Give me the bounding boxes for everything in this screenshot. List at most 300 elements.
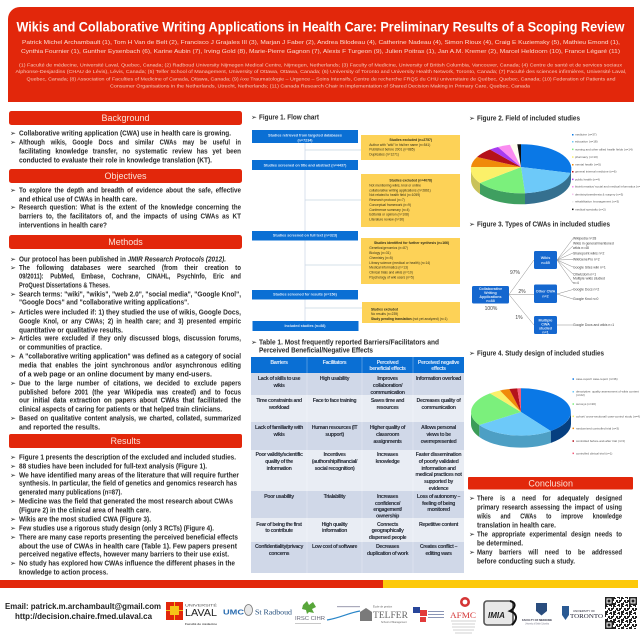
text block: results: ➢ (10, 454, 16, 462)
table cells: resources (377, 405, 399, 411)
table cells: to contribute (265, 528, 293, 534)
table cells: social recognition) (315, 466, 355, 472)
tree labels: Google Knol n=0 (573, 297, 598, 301)
logo: Telfer: TELFER (373, 611, 409, 621)
text block: conclusion: be determined. (477, 538, 523, 548)
text block: methods: Google Knol, or any CWAs; 2) in health care; and 3) presented empiric (19, 316, 241, 326)
box: included studies: Included studies (n=88) (284, 324, 326, 328)
legend: fields: medicine (n=37) (575, 133, 597, 137)
logo: University of Toronto: UNIVERSITY OF (573, 609, 595, 613)
affiliations (16, 62, 626, 88)
logo: Université Laval (166, 602, 218, 626)
table cells: information (322, 528, 347, 534)
table cells: Creates conflict – (420, 544, 458, 550)
table cells: Face to face training (313, 398, 356, 404)
tree labels: n=4 (573, 281, 579, 285)
pie chart: study design (471, 388, 571, 448)
text block: background: ➢ (10, 139, 16, 147)
QR code (605, 597, 637, 629)
heading: figure 1: Figure 1. Flow chart (259, 112, 319, 122)
table cells: workload (268, 405, 289, 411)
legend: fields: medical specialty (n=2) (575, 207, 606, 211)
box: multiple CWAs: CWA (541, 322, 550, 326)
percentages: 100% (485, 306, 498, 312)
box: multiple CWAs: n=1 (542, 330, 549, 334)
table header: Perceived (377, 360, 398, 366)
text block: results: synthesis. In particular, the field of genetics and genomics research has (19, 478, 237, 488)
table cells: Saves time and (371, 398, 404, 404)
table header: Facilitators (323, 360, 347, 366)
table cells: Increases (377, 494, 398, 500)
box: retrieved: Studies retrieved from targeted databases (268, 133, 342, 137)
logo: NPCF (413, 607, 444, 622)
percentages: 97% (510, 270, 521, 276)
text block: methods: 09/2011): PubMed, Embase, Cochrane, CINAHL, PsychInfo, Eric and (19, 272, 241, 280)
contact details: http://decision.chaire.fmed.ulaval.ca (15, 612, 153, 621)
table cells: dispersed people (369, 535, 407, 541)
text block: results: Wikis are the most studied CWA (Figure 3). (19, 514, 151, 524)
logo: IMIA: IMIA (488, 611, 505, 620)
percentages (485, 270, 526, 321)
exclusion box 2: Studies excluded (n=4078) (389, 178, 432, 182)
text block: methods: ➢ (10, 264, 16, 272)
table cells: Time constraints and (256, 398, 302, 404)
logo: University of Toronto: TORONTO (570, 614, 603, 620)
box: retrieved: (n=7234) (297, 139, 313, 143)
table cells: Information overload (416, 376, 461, 382)
table cells: wikis (272, 432, 285, 438)
box: included studies (252, 321, 358, 331)
tree labels: Citiwizdom n=1 (573, 272, 596, 276)
table cells: geographically (371, 528, 404, 534)
box: full text: Studies screened on full text (n=323) (273, 234, 338, 238)
header banner (8, 7, 634, 102)
exclusion box 2 (361, 174, 460, 227)
table cells: feeling of being (422, 501, 455, 507)
text block: results: about the use of CWAs in health care (Table 1). Few papers present (19, 542, 237, 550)
logo: IRSC CIHR (295, 601, 325, 624)
table header: beneficial effects (369, 366, 406, 372)
box: title and abstract: Studies screened on title and abstract (n=4437) (264, 163, 347, 167)
table cells: information and (421, 466, 456, 472)
heading: figure 1: ➢ (251, 114, 257, 122)
text block: methods: Search terms: "wiki", "wikis", "web 2.0", "social media", "Google Knol", (19, 290, 241, 298)
table cells: communication (370, 390, 405, 396)
table header: Barriers (270, 360, 288, 366)
table cells: Decreases (376, 544, 399, 550)
logo: swoosh (327, 606, 360, 620)
heading: conclusion: Conclusion (528, 479, 573, 489)
root box (472, 286, 509, 304)
text block: methods: quantitative or qualitative results. (19, 326, 123, 334)
synthesis box: Chemistry (n=5) (369, 256, 393, 260)
exclusion box 2: Research protocol (n=7) (369, 198, 405, 202)
tree labels: Google Docs and wikis n=1 (573, 323, 614, 327)
table cells: support) (325, 432, 344, 438)
text block: results: ➢ (10, 516, 16, 524)
text block: methods: ➢ (10, 415, 16, 423)
text block: objectives: Research question: What is the extent of the knowledge concerning the (19, 202, 241, 212)
text block: background: facilitating knowledge transfer, no systematic review has yet been (19, 146, 241, 156)
legend: fields: education (n=18) (575, 140, 598, 144)
text block: methods: Based on qualitative content analysis, we charted, collated, summarized (19, 414, 241, 422)
text block: methods: The following databases were searched (from their creation to (19, 263, 241, 272)
box: results screening (252, 290, 358, 300)
synthesis box: Psychology of wiki users (n=5) (369, 276, 414, 280)
text block: objectives (10, 186, 241, 230)
exclusion box 3: Study pending translation (not yet analyzed) (n=1) (371, 317, 448, 321)
table cells: Higher quality of (370, 425, 406, 431)
logo: Université Laval: UNIVERSITÉ (185, 602, 218, 608)
legend: fields: general internal medicine (n=6) (575, 170, 616, 174)
logo: Telfer (360, 604, 409, 624)
text block: objectives: ➢ (10, 187, 16, 195)
synthesis box: Genetics/genomics (n=87) (369, 246, 408, 250)
panel: background (9, 111, 242, 164)
legend: fields: mental health (n=5) (575, 163, 601, 167)
box: full text (252, 231, 358, 240)
panel: conclusion (468, 477, 633, 566)
box: multiple CWAs: studied (539, 326, 553, 330)
text block: results: There are many case reports presenting the perceived beneficial effects (19, 532, 238, 542)
table cells: High usability (320, 376, 350, 382)
exclusion box 2: Literature review (n=30) (369, 218, 404, 222)
text block: objectives: To explore the depth and breadth of evidence about the safe, effective (19, 186, 241, 194)
table cells: engagement/ (373, 507, 403, 513)
text block: methods: Articles were included if: 1) they studied the use of wikis, Google Docs, (19, 308, 241, 316)
exclusion box 2: Not related to health field (n=1059) (369, 193, 420, 197)
logo: UMC St Radboud (223, 604, 293, 616)
logo: University of Toronto (562, 606, 603, 620)
table cells: quality of the (265, 459, 293, 465)
text block: conclusion: ➢ (469, 495, 475, 503)
pie chart: fields (471, 144, 571, 204)
text block: methods: ➢ (10, 380, 16, 388)
table cells: classroom (376, 432, 400, 438)
text block: results: ➢ (10, 463, 16, 471)
heading: table 1 (251, 338, 439, 354)
text block: results (10, 452, 239, 576)
text block: results: ➢ (10, 560, 16, 568)
tree labels: Sharepoint wikis n=2 (573, 251, 604, 255)
tree labels: Google Sites wiki n=1 (573, 266, 606, 270)
legend: study design: (n=22) (576, 393, 585, 397)
text block: objectives: and ethical use of CWAs in health care. (19, 194, 137, 204)
exclusion box 3 (362, 302, 460, 323)
text block: conclusion: ➢ (469, 549, 475, 557)
affiliations: Quebec, Canada; (8) Association of Faculties of Medicine of Canada, Ottawa, Canada; (9) Axe Traumatologie – Urgence – Soins Intensifs, Centre de recherche FRQS du CHU universitaire de Québec, Quebec, Canada; (10) Federation of Patients and (26, 76, 616, 82)
table cells: concerns (269, 551, 290, 557)
logo: Telfer: École de gestion (373, 604, 393, 608)
text block: methods: clinical aspects of caring for patients or that helped train clinicians. (19, 404, 222, 414)
text block: conclusion: before conducting such a study. (477, 556, 575, 566)
heading: methods: Methods (108, 237, 143, 247)
heading: table 1: Perceived Beneficial/Negative Effects (259, 346, 373, 354)
table cells: views to be (426, 432, 451, 438)
legend: fields (572, 133, 640, 211)
table cells: information (267, 466, 292, 472)
logo: UMC St Radboud: St Radboud (255, 608, 293, 616)
box: multiple CWAs: Multiple (539, 318, 552, 322)
table cells: (authorship/financial/ (312, 459, 358, 465)
tree labels: wikis n=48 (573, 246, 589, 250)
heading: figure 2: Figure 2. Field of included studies (477, 114, 580, 122)
legend: study design: controlled clinical trial (n=1) (576, 451, 612, 455)
tree labels: Wikis in general/mentioned (573, 242, 614, 246)
text block: results: 88 studies have been included for full-text analysis (Figure 1). (19, 462, 207, 470)
root box: n=88 (486, 299, 495, 303)
table cells: Lack of skills to use (258, 376, 301, 382)
text block: methods: our initial data extraction on papers about CWAs that facilitated the (19, 396, 241, 404)
table cells: evidence (429, 486, 449, 492)
table rows (251, 373, 464, 573)
text block: methods: ProQuest Dissertations & Theses. (19, 280, 110, 290)
heading: objectives: Objectives (104, 171, 147, 181)
text block: conclusion: translation in health care. (477, 520, 556, 530)
text block: objectives: barriers to, the facilitators of, and the impacts of using CWAs as KT (19, 212, 241, 220)
legend: study design: randomized controlled trial (n=3) (576, 426, 619, 430)
table cells: Connects (377, 522, 398, 528)
text block: methods: Our protocol has been published in JMIR Research Protocols (2012). (19, 254, 226, 264)
text block: methods: ➢ (10, 335, 16, 343)
heading: table 1: ➢ (251, 339, 257, 347)
root box: Collaborative (479, 287, 502, 291)
heading: objectives (9, 169, 242, 183)
text block: results: We have identified many areas of the literature that will require further (19, 470, 239, 480)
logo: IMIA (484, 601, 516, 625)
text block: conclusion (469, 494, 622, 566)
authors: Patrick Michel Archambault (1), Tom H Van de Belt (2), Francisco J Grajales III (3), Marjan J Faber (2), Andrea Bilodeau (4), Catherine Nadeau (4), Simon Rioux (4), Craig E Kuziemsky (5), Mathieu Emond (1), (22, 40, 620, 46)
legend: fields: public health (n=4) (575, 177, 600, 181)
table cells: supported by (424, 479, 453, 485)
synthesis box: Clinical trials and wikis (n=10) (369, 270, 413, 274)
exclusion box 1: Duplicates (n=1271) (369, 152, 399, 156)
authors (21, 40, 620, 55)
affiliations: Consumer Organisations in the Netherlands, Utrecht, Netherlands; (11) Canada Research Chair in Implementation of Shared Decision Making in Primary Care, Quebec, Canada (110, 84, 531, 88)
legend: study design: descriptive: quality assessment of wikis content (576, 390, 639, 394)
root box: Writing (484, 291, 497, 295)
logo: AFMC (450, 597, 476, 633)
text block: results: ➢ (10, 534, 16, 542)
text block: methods: ➢ (10, 291, 16, 299)
table cells: Faster dissemination (416, 452, 461, 458)
exclusion box 1: Studies excluded (n=2757) (389, 138, 432, 142)
affiliations: (1) Faculté de médecine, Université Laval, Quebec, Canada; (2) Radboud University Nijmegen Medical Centre, Nijmegen, Netherlands; (3) Faculty of Medicine, University of British Columbia, Vancouver, Canada; (4) Centre de santé et de services sociaux (19, 62, 623, 68)
text block: background: Collaborative writing application (CWA) use in health care is growing. (19, 128, 231, 138)
synthesis box: Studies identified for further synthesis (n=166) (374, 241, 449, 245)
figure 1: flow chart (251, 112, 460, 331)
table cells: Lack of familiarity with (255, 425, 303, 431)
legend: study design: surveys (n=20) (576, 402, 596, 406)
percentages: 1% (515, 315, 523, 321)
tree labels: Wikipedia n=28 (573, 236, 596, 240)
exclusion box 1: Author with "wiki" in his/her name (n=541) (369, 143, 430, 147)
heading: figure 2: ➢ (469, 115, 475, 123)
table cells: Poor validity/scientific (255, 452, 303, 458)
tree labels: Multiple wikis studied (573, 276, 605, 280)
text block: results: Medicine was the field that generated the most research about CWAs (19, 496, 233, 506)
table cells: communication (421, 405, 456, 411)
contact details (5, 602, 161, 621)
root box: Applications (479, 295, 502, 299)
table cells: Fear of being the first (256, 522, 302, 528)
exclusion box 3: No results (n=239) (371, 312, 398, 316)
legend: fields: rehabilitation /management (n=3) (575, 200, 619, 204)
heading: results (9, 434, 242, 448)
text block: results: ➢ (10, 472, 16, 480)
heading: figure 3: ➢ (469, 221, 475, 229)
table cells: High quality (322, 522, 348, 528)
exclusion box 2: Conceptual framework (n=9) (369, 203, 411, 207)
text block: methods: or communities of practice. (19, 342, 102, 352)
text block: background: ➢ (10, 130, 16, 138)
legend: study design: cohort/ cross-sectional/ case-control study (n=4) (576, 414, 640, 418)
text block: objectives: ➢ (10, 204, 16, 212)
table cells: Incentives (323, 452, 346, 458)
legend: study design: controlled before-and-after trial (n=3) (576, 439, 625, 443)
legend: fields: dentistry/anesthesia & surgery (n=3) (575, 192, 623, 196)
logo: Telfer: School of Management (381, 621, 407, 624)
heading: table 1: Table 1. Most frequently reported Barriers/Facilitators and (259, 338, 439, 346)
text block: methods: Due to the large number of citations, we decided to exclude papers (19, 378, 241, 388)
table cells: Repetitive content (419, 522, 459, 528)
heading: conclusion (468, 477, 633, 490)
tree labels: WikiGenePro n=2 (573, 258, 600, 262)
synthesis box: Medical informatics (n=13) (369, 266, 408, 270)
text block: methods: ➢ (10, 256, 16, 264)
logo: UBC Faculty of Medicine: University of British Columbia (525, 622, 550, 626)
text block: conclusion: ➢ (469, 531, 475, 539)
tree labels: Google Docs n=2 (573, 288, 599, 292)
text block: background: conducted to evaluate their role in knowledge translation (KT). (19, 156, 212, 164)
heading: results: Results (110, 436, 141, 446)
figure 3: types of CWAs (469, 220, 614, 334)
text block: background (10, 128, 241, 164)
synthesis box: Biology (n=31) (369, 251, 391, 255)
heading: figure 4: Figure 4. Study design of included studies (477, 348, 604, 358)
heading: background: Background (101, 113, 150, 123)
authors: Cynthia Fournier (1), Gunther Eysenbach (6), Karine Aubin (7), Irving Gold (8), Marie-Pierre Gagnon (7), Alexis F Turgeon (9), Julien Poitras (1), Jan A.M. Kremer (2), Marcel Heldoorn (10), France Légaré (11) (21, 49, 620, 55)
table cells: medical practices not (415, 472, 462, 478)
legend: study design: case-report/ case-report (n=36) (576, 377, 618, 381)
table cells: confidence/ (375, 501, 401, 507)
table header: Perceived negative (418, 360, 460, 366)
text block: results: ➢ (10, 498, 16, 506)
table cells: Confidentiality/privacy (255, 544, 303, 550)
text block: results: perceived negative effects, however many barriers to their use exist. (19, 550, 229, 558)
heading: background (9, 111, 242, 125)
affiliations: Alphonse-Desjardins (CHAU de Lévis), Lévis, Canada; (5) Telfer School of Management, University of Ottawa, Ottawa, Canada; (6) University of Toronto and University Health Network, Toronto, Canada; (7) Faculté des sciences infirmières, Université Laval, (16, 69, 626, 74)
text block: methods: published before 2001 (the year Wikipedia was created) and to focus (19, 388, 241, 396)
heading: figure 3: Figure 3. Types of CWAs in included studies (477, 220, 610, 228)
text block: results: No study has explored how CWAs influence the different phases in the (19, 558, 235, 568)
text block: results: ➢ (10, 525, 16, 533)
table cells: assignments (373, 439, 402, 445)
box: wikis: n=85 (541, 261, 550, 265)
logo: Université Laval: LAVAL (185, 608, 217, 619)
legend: study design (572, 377, 640, 455)
table cells: of poorly validated (419, 459, 459, 465)
box: other CWAs (534, 284, 557, 303)
text block: methods: of a web page or an online document by many end-users. (19, 370, 212, 378)
tree connectors (509, 238, 573, 325)
box: wikis (534, 251, 557, 269)
table cells: ownership (376, 513, 400, 519)
text block: methods: ➢ (10, 309, 16, 317)
table cells: Increases (377, 452, 398, 458)
exclusion box 1 (361, 135, 460, 160)
table cells: duplication of work (367, 551, 409, 557)
box: results screening: Studies screened for results (n=156) (273, 293, 338, 297)
exclusion box 3: Studies excluded (371, 308, 398, 312)
box: other CWAs: n=2 (542, 294, 549, 298)
box: multiple CWAs (534, 316, 557, 334)
logo: IRSC CIHR: IRSC CIHR (295, 616, 325, 622)
table cells: Loss of autonomy – (417, 494, 461, 500)
text block: results: knowledge to action process. (19, 568, 108, 576)
table cells: Decreases quality of (417, 398, 461, 404)
logo: UBC Faculty of Medicine: FACULTY OF MEDICINE (522, 618, 552, 622)
exclusion box 1: Published before 2001 (n=885) (369, 148, 415, 152)
table cells: monitored (427, 507, 450, 513)
flow connectors (305, 143, 362, 321)
panel: objectives (9, 169, 242, 230)
text block: methods: media that enables the joint synchronous and/or asynchronous editing (19, 360, 241, 370)
table header: effects (431, 366, 446, 372)
text block: results: Few studies use a rigorous study design (only 3 RCTs) (Figure 4). (19, 524, 214, 532)
contact details: Email: patrick.m.archambault@gmail.com (5, 602, 161, 611)
table 1: barriers and facilitators (251, 338, 464, 573)
table cells: wikis (272, 383, 285, 389)
text block: results: generated many publications (n=87). (19, 488, 122, 496)
synthesis box: Library science (medical or health) (n=14) (369, 261, 430, 265)
text block: methods: ➢ (10, 353, 16, 361)
table cells: collaboration/ (373, 383, 403, 389)
box: title and abstract (252, 160, 358, 170)
table cells: Trialability (324, 494, 346, 500)
synthesis box (361, 238, 460, 284)
exclusion box 2: Not mentioning wikis, knol or online (369, 184, 421, 188)
panel: methods (9, 235, 242, 432)
heading: methods (9, 235, 242, 249)
logo: Université Laval: Faculté de médecine (185, 622, 218, 626)
figure 4: study design (469, 348, 640, 455)
text block: results: Figure 1 presents the description of the excluded and included studies. (19, 452, 236, 462)
text block: objectives: interventions in health care? (19, 220, 107, 230)
exclusion box 2: Editorial or opinion (n=108) (369, 212, 409, 216)
logo: AFMC: AFMC (450, 611, 476, 620)
text block: methods: Articles were excluded if they only discussed blogs, discussion forums, (19, 334, 241, 342)
table cells: Human resources (IT (312, 425, 358, 431)
text block: methods: and reported the results. (19, 422, 100, 432)
text block: results: (Figure 2) in the clinical area of health care. (19, 506, 151, 514)
logo: UBC Faculty of Medicine (522, 603, 552, 626)
box: other CWAs: Other CWA (536, 290, 556, 294)
table header (251, 357, 464, 373)
figure 2: field of included studies (469, 114, 640, 211)
table cells: knowledge (376, 459, 400, 465)
text block: methods: "Google Docs" and "collaborative writing applications". (19, 298, 189, 306)
table cells: Poor usability (264, 494, 294, 500)
text block: methods (10, 254, 241, 432)
table cells: Improves (377, 376, 398, 382)
footer colour band (0, 580, 638, 588)
legend: fields: pharmacy (n=10) (575, 155, 598, 159)
legend: fields: nursing and other allied health fields (n=14) (575, 147, 633, 151)
box: wikis: Wikis (541, 256, 550, 260)
heading: figure 4: ➢ (469, 350, 475, 358)
text block: methods: A "collaborative writing application" was defined as a category of social (19, 352, 241, 360)
